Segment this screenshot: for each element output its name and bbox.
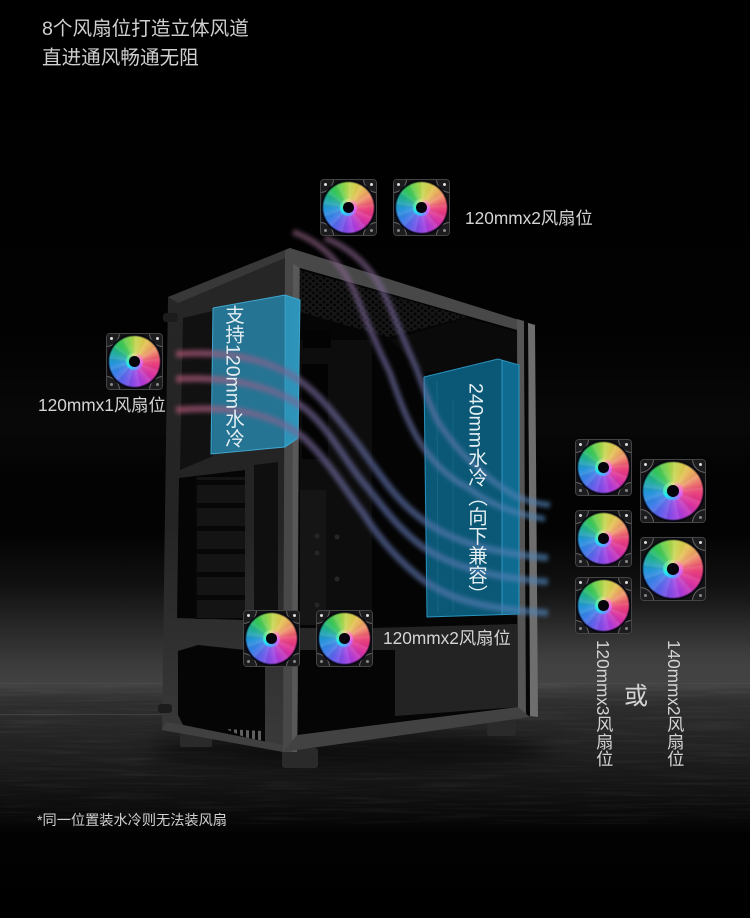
title: 8个风扇位打造立体风道: [42, 18, 249, 40]
label: bottom fans: 120mmx2风扇位: [383, 628, 511, 648]
fan: rear: [106, 333, 163, 390]
footnote: *同一位置装水冷则无法装风扇: [37, 813, 227, 829]
airflow streams: [176, 232, 550, 613]
case shadow: [150, 732, 550, 768]
fan: bottom right: [316, 610, 373, 667]
label: 120mm water cooling: 支持120mm水冷: [222, 305, 244, 448]
airflow: left intake: [176, 353, 548, 613]
label: or: 或: [624, 683, 648, 710]
right pillar: [517, 319, 526, 716]
front pillar: [283, 250, 300, 752]
bottom rail: [283, 707, 530, 752]
fan: top left: [320, 179, 377, 236]
fan: front 140mm 1: [640, 459, 706, 523]
fan: bottom left: [243, 610, 300, 667]
case interior: [298, 268, 517, 736]
left side frame: [162, 248, 296, 752]
left side openings: [177, 311, 278, 742]
water cooling block: 120mm: [211, 295, 300, 454]
label: 240mm water cooling: 240mm水冷（向下兼容）: [464, 383, 486, 604]
fan group: front 120mm: [575, 439, 632, 634]
airflow: top intake: [293, 232, 550, 519]
fan group: bottom: [243, 610, 373, 667]
top mesh: [300, 270, 467, 337]
label: top fans: 120mmx2风扇位: [465, 208, 593, 228]
label: front 140mm fans: 140mmx2风扇位: [664, 640, 684, 767]
fan group: front 140mm: [640, 459, 706, 601]
fan: top right: [393, 179, 450, 236]
label: rear fan: 120mmx1风扇位: [38, 395, 166, 415]
fan group: top: [320, 179, 450, 236]
title: [42, 18, 249, 69]
pc case: [150, 248, 550, 768]
case feet: [180, 718, 516, 768]
fan: front 120mm 3: [575, 577, 632, 634]
fan: front 120mm 2: [575, 510, 632, 567]
label: front 120mm fans: 120mmx3风扇位: [593, 640, 613, 767]
psu shroud: [297, 624, 518, 716]
fan: front 140mm 2: [640, 537, 706, 601]
top frame: [285, 248, 535, 330]
title: 直进通风畅通无阻: [42, 47, 199, 69]
water cooling block: 240mm: [424, 359, 519, 617]
fan: front 120mm 1: [575, 439, 632, 496]
